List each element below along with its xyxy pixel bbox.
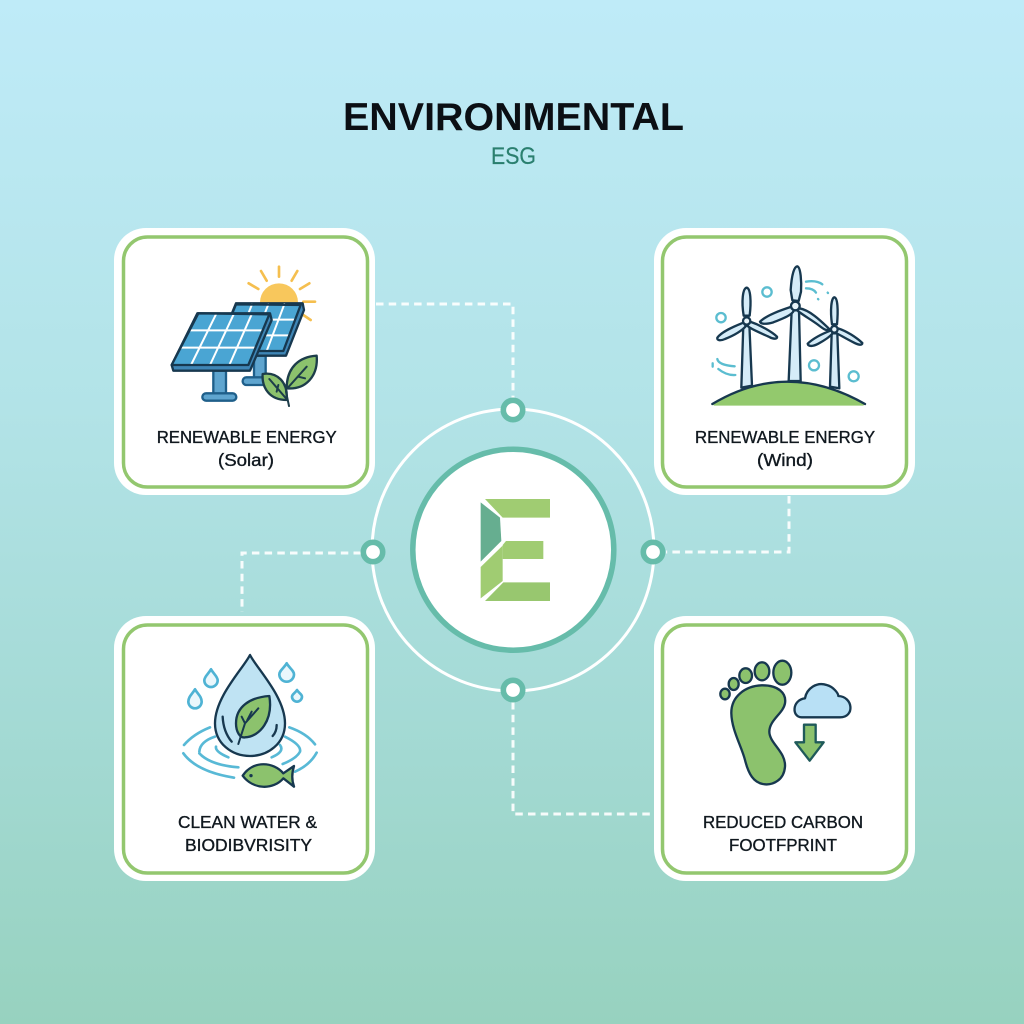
label: water: BIODIBVRISITY <box>185 835 312 855</box>
icon: cloud <box>795 684 850 717</box>
icon: air particles <box>713 281 859 381</box>
icon: fish <box>243 764 294 787</box>
label: solar: RENEWABLE ENERGY <box>157 427 337 447</box>
icon: ripples <box>183 727 317 778</box>
icon: front panel <box>172 313 272 401</box>
icon: leaves <box>263 356 317 406</box>
label: wind: RENEWABLE ENERGY <box>695 427 875 447</box>
card frame <box>654 616 915 881</box>
label: solar: (Solar) <box>218 450 274 470</box>
panel: solar <box>114 228 375 495</box>
label: water: CLEAN WATER & <box>178 812 317 832</box>
icon: hill <box>712 382 865 406</box>
label: wind: (Wind) <box>757 450 813 470</box>
icon: water drop <box>183 655 317 787</box>
node: top <box>503 400 523 420</box>
label: solar <box>157 427 337 470</box>
card frame <box>114 616 375 881</box>
icon: turbine left <box>717 288 777 388</box>
outer ring <box>372 409 654 691</box>
card frame <box>654 228 915 495</box>
dashed connectors <box>242 304 789 814</box>
node: right <box>643 542 663 562</box>
icon: small drops <box>188 663 302 708</box>
icon: turbine right <box>808 297 862 388</box>
central emblem <box>363 400 663 700</box>
icon: turbine centre <box>760 266 829 381</box>
subtitle: ESG <box>491 143 536 170</box>
letter E logo <box>481 499 550 601</box>
inner circle <box>413 449 614 650</box>
icon: down arrow <box>795 725 824 761</box>
label: carbon: REDUCED CARBON <box>703 812 863 832</box>
panel: carbon <box>654 616 915 881</box>
label: carbon <box>703 812 863 855</box>
label: wind <box>695 427 875 470</box>
icon: wind turbines <box>712 266 865 406</box>
icon: solar panels <box>172 267 317 406</box>
icon: sun <box>249 267 315 321</box>
icon: back panel <box>217 303 304 385</box>
icon: leaf in drop <box>223 696 277 744</box>
label: water <box>178 812 317 855</box>
icon: main drop <box>215 655 285 756</box>
icon: footprint <box>720 661 791 784</box>
panel: wind <box>654 228 915 495</box>
card frame <box>114 228 375 495</box>
label: carbon: FOOTFPRINT <box>729 835 837 855</box>
panel: water <box>114 616 375 881</box>
title: ENVIRONMENTAL <box>343 96 684 139</box>
node: bottom <box>503 680 523 700</box>
icon: footprint and cloud <box>720 661 850 784</box>
node: left <box>363 542 383 562</box>
